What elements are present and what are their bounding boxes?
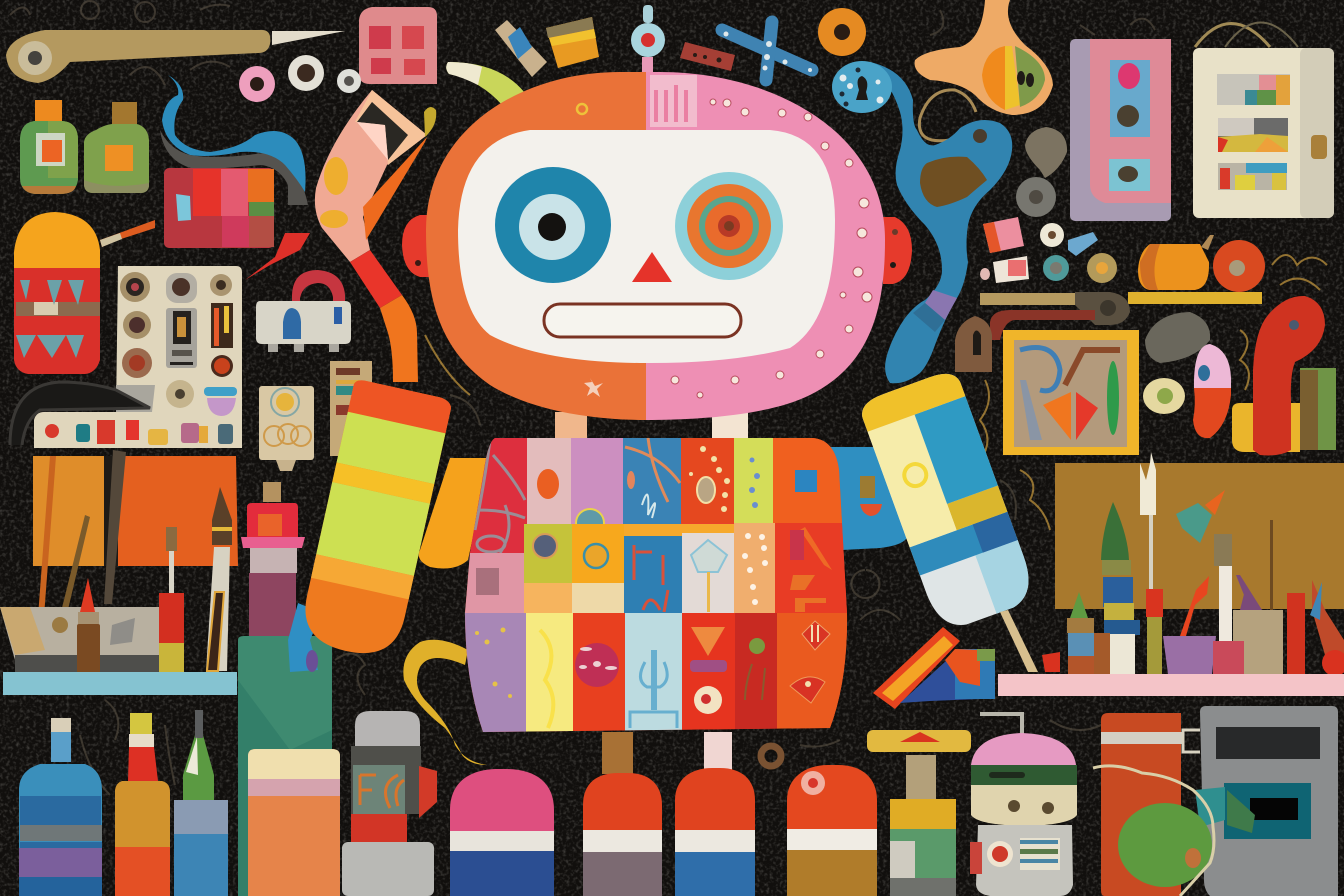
round button with stem xyxy=(1143,378,1185,414)
brown brick xyxy=(680,42,735,71)
pink shelf xyxy=(998,674,1344,696)
control panel: dials and slots xyxy=(10,266,242,448)
patch row 3 xyxy=(465,613,853,733)
key shaped pin xyxy=(631,5,665,73)
pink and red capsule xyxy=(1193,344,1231,438)
mouth xyxy=(544,304,741,337)
jar: yellow lid with zigzag band xyxy=(14,212,100,374)
grey appliance with teal window xyxy=(1183,706,1338,896)
T-shaped stamp xyxy=(867,730,971,896)
blue shoulder and pocket xyxy=(822,447,908,550)
little robot appliance xyxy=(970,714,1077,896)
red keyhole shape with blocks xyxy=(1232,296,1336,455)
robot ears xyxy=(402,215,912,284)
blue flowing figure xyxy=(832,61,1012,383)
rocket crayon xyxy=(1101,502,1140,674)
tray with grey block xyxy=(0,607,160,672)
tall brush xyxy=(206,487,232,671)
robot foot: red and blue xyxy=(675,768,755,896)
brown ring near feet xyxy=(761,746,781,766)
green box with blue ribbon xyxy=(238,603,332,896)
blue cross xyxy=(722,22,812,80)
right arm: blue yellow sleeve xyxy=(857,368,1039,634)
pencil cup and tools xyxy=(1176,490,1283,674)
robot foot: orange and brown xyxy=(787,765,877,896)
wavy blue ribbon xyxy=(160,75,308,205)
brush in red and yellow sleeve xyxy=(159,527,184,674)
orange ring xyxy=(818,8,866,56)
bottle: olive with square label xyxy=(84,102,149,193)
card: striped label xyxy=(330,361,372,456)
robot face plate xyxy=(458,130,835,363)
buttons: small rings xyxy=(239,55,361,102)
head dots xyxy=(671,99,872,398)
marker: red tip brown body xyxy=(77,578,100,674)
green roll with wire xyxy=(1093,766,1255,896)
bottle: yellow neck, amber and red body xyxy=(115,713,170,896)
white palette knife xyxy=(1140,452,1163,674)
orange book and colour blocks xyxy=(873,627,995,709)
card: cream panel with colour strips xyxy=(1193,22,1334,218)
keyhole grey pair xyxy=(1016,127,1067,217)
orange shoulder behind left arm xyxy=(419,458,490,568)
left arm: striped sleeve xyxy=(297,379,453,662)
bottle: green nib in blue sleeve xyxy=(174,710,228,896)
robot neck xyxy=(555,412,748,440)
banana shape above head xyxy=(446,62,525,106)
small yellow box xyxy=(546,17,599,68)
tan board on right xyxy=(1055,463,1344,609)
red splash shape xyxy=(245,233,310,280)
card: scribbled rings xyxy=(259,386,314,471)
patch row 2 xyxy=(465,523,853,613)
tool: wooden awl at top left xyxy=(6,30,345,83)
small paintbrush xyxy=(100,220,155,247)
patch row 1 xyxy=(465,438,853,553)
nose xyxy=(632,252,672,282)
thermos: grey cap with patterned label xyxy=(342,711,437,896)
crayon tube top xyxy=(495,20,547,77)
horseshoe magnet and white block xyxy=(256,270,351,352)
light blue shelf xyxy=(3,672,237,695)
yellow hook xyxy=(403,640,487,765)
left eye xyxy=(495,167,611,283)
yellow shelf with brush handle xyxy=(980,292,1262,340)
large orange paper with brushes xyxy=(33,450,238,630)
bottle: green with orange cap xyxy=(20,100,78,194)
robot foot: pink and blue xyxy=(450,769,554,896)
small green cone marker xyxy=(1042,592,1110,674)
tub: cream, pink, orange bands xyxy=(248,749,340,896)
robot head xyxy=(420,60,891,430)
grey stone xyxy=(1145,312,1210,363)
top orange blob with face xyxy=(915,0,1053,115)
robot foot: red and grey xyxy=(583,773,662,896)
red canister xyxy=(1101,713,1182,896)
small buttons cluster xyxy=(980,217,1117,283)
card: pink cassette with blue window xyxy=(1070,39,1171,221)
paint tube: red cap, plum body xyxy=(241,482,305,636)
tool: brush stem at shelf xyxy=(1000,610,1038,672)
right eye xyxy=(675,172,783,280)
bottle: blue stripes xyxy=(19,718,102,896)
orange gourd and red ball xyxy=(1138,235,1265,292)
pink arm: bent limb with orange strip xyxy=(315,90,436,382)
card: pink with red squares xyxy=(359,7,437,84)
jar: purple cup xyxy=(1163,576,1216,674)
robot legs xyxy=(602,732,732,774)
robot body: patchwork quilt xyxy=(460,430,855,740)
small clay arch xyxy=(955,316,992,372)
red stick and tube xyxy=(1287,580,1344,676)
framed abstract picture xyxy=(1003,330,1139,455)
colour block panel xyxy=(164,168,274,248)
